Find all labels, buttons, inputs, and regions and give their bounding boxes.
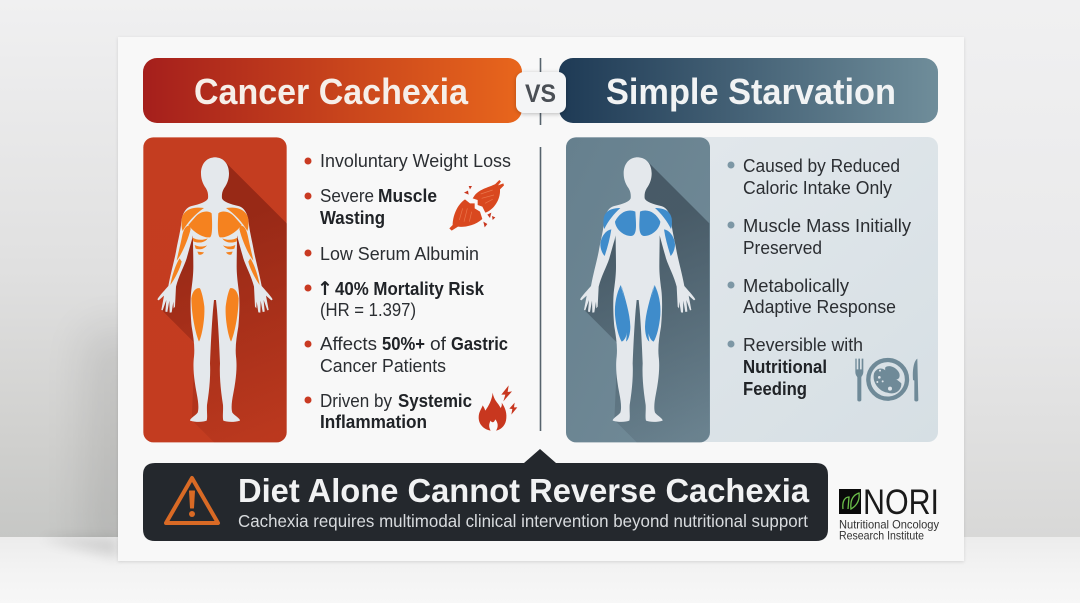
header: Cancer Cachexia — [143, 58, 522, 123]
list: cachexia bullets: of — [430, 334, 447, 354]
orange muscles — [170, 208, 260, 342]
logo: NORI: Research Institute — [839, 528, 924, 542]
list: starvation bullets: Adaptive Response — [743, 297, 896, 317]
logo: NORI: NORI — [863, 483, 939, 522]
icon: warning triangle — [166, 478, 218, 523]
logo: NORI — [839, 483, 939, 542]
blue muscles — [600, 208, 675, 342]
list: cachexia bullets: Gastric — [451, 334, 508, 354]
list: cachexia bullets — [304, 151, 511, 432]
logo: NORI: Nutritional Oncology — [839, 518, 939, 532]
list: cachexia bullets: Severe — [320, 186, 374, 206]
panel: starvation body figure — [566, 137, 716, 450]
list: starvation bullets: Reversible with — [743, 335, 863, 355]
list: cachexia bullets: 50%+ — [382, 334, 425, 354]
VS badge — [516, 72, 566, 113]
list: cachexia bullets: Driven by — [320, 391, 392, 411]
callout: diet alone cannot reverse cachexia: Diet Alone Cannot Reverse Cachexia — [238, 472, 810, 509]
list: cachexia bullets: Muscle — [378, 186, 437, 206]
callout: diet alone cannot reverse cachexia — [143, 449, 828, 541]
list: starvation bullets: Metabolically — [743, 276, 849, 296]
list: starvation bullets: Preserved — [743, 238, 822, 258]
list: starvation bullets — [728, 156, 911, 399]
list: cachexia bullets: Cancer Patients — [320, 356, 446, 376]
long shadow — [162, 162, 293, 450]
panel: cachexia body figure — [143, 137, 293, 450]
list: cachexia bullets: Affects — [320, 334, 377, 354]
list: cachexia bullets: ↑ — [317, 278, 333, 300]
header: Cancer Cachexia: Cancer Cachexia — [194, 71, 469, 112]
icon: flame with sparks — [479, 385, 517, 431]
list: starvation bullets: Nutritional — [743, 357, 827, 377]
long shadow — [584, 162, 716, 450]
body silhouette — [580, 157, 695, 422]
VS badge: VS — [525, 80, 556, 108]
list: starvation bullets: Muscle Mass Initially — [743, 216, 911, 236]
list: cachexia bullets: (HR = 1.397) — [320, 300, 416, 320]
list: cachexia bullets: Wasting — [320, 208, 385, 228]
list: cachexia bullets: Low Serum Albumin — [320, 244, 479, 264]
list: starvation bullets: Feeding — [743, 379, 807, 399]
list: cachexia bullets: 40% Mortality Risk — [335, 279, 485, 299]
list: starvation bullets: Caused by Reduced — [743, 156, 900, 176]
list: cachexia bullets: Involuntary Weight Loss — [320, 151, 511, 171]
icon: plate with fork and knife — [855, 359, 918, 401]
callout: diet alone cannot reverse cachexia: Cachexia requires multimodal clinical intervention beyond nutritional support — [238, 511, 808, 531]
list: cachexia bullets: Inflammation — [320, 412, 427, 432]
icon: torn muscle — [449, 180, 504, 231]
list: cachexia bullets: Systemic — [398, 391, 472, 411]
list: starvation bullets: Caloric Intake Only — [743, 178, 892, 198]
body silhouette — [157, 157, 273, 422]
header: Simple Starvation — [559, 58, 938, 123]
header: Simple Starvation: Simple Starvation — [606, 71, 896, 112]
center divider — [540, 58, 542, 431]
card — [118, 37, 964, 561]
panel: starvation background — [566, 137, 938, 442]
